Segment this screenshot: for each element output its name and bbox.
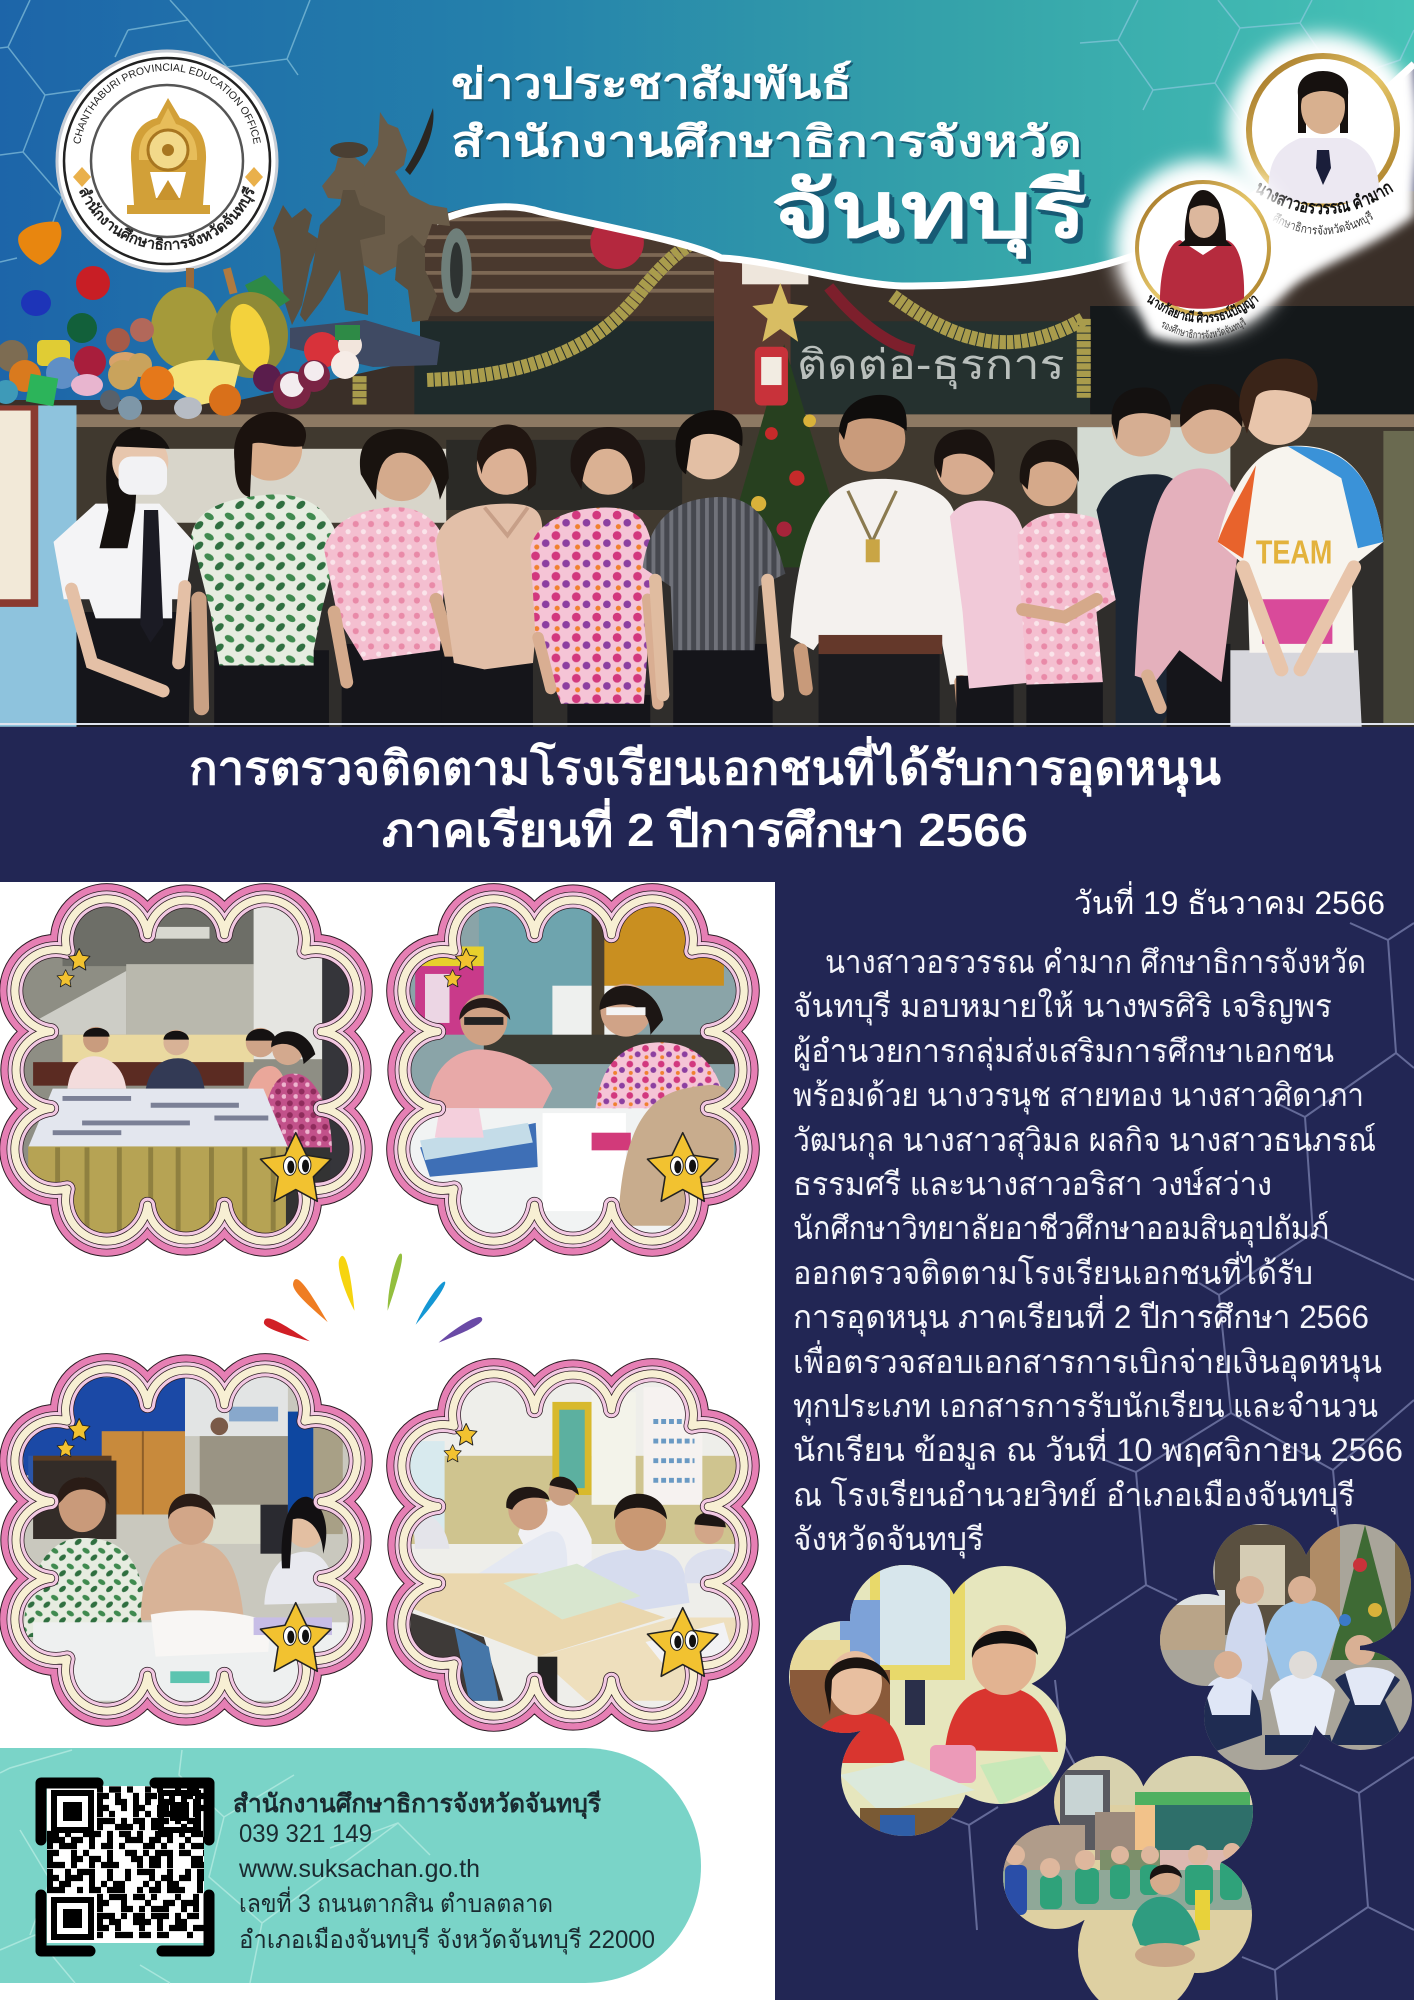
portrait 1 role: ศึกษาธิการจังหวัดจันทบุรี <box>1273 210 1373 235</box>
body text: เพื่อตรวจสอบเอกสารการเบิกจ่ายเงินอุดหนุน <box>793 1340 1382 1382</box>
seal thai text: สำนักงานศึกษาธิการจังหวัดจันทบุรี <box>79 186 255 250</box>
stars <box>444 1423 718 1676</box>
contact bar <box>0 1748 701 1983</box>
person 5: multi-colour floral <box>530 427 658 727</box>
stars <box>57 1418 331 1671</box>
colour burst <box>264 1254 482 1343</box>
person 4: beige <box>436 424 543 727</box>
body text: พร้อมด้วย นางวรนุช สายทอง นางสาวศิดาภา <box>793 1077 1364 1115</box>
seal emblem <box>127 98 210 214</box>
garlands <box>360 232 1084 405</box>
person 1: student <box>54 427 194 727</box>
gemstones <box>0 222 142 420</box>
contact text: สำนักงานศึกษาธิการจังหวัดจันทบุรี <box>233 1790 602 1820</box>
title line 2: ภาคเรียนที่ 2 ปีการศึกษา 2566 <box>382 798 1028 856</box>
heading lines <box>451 60 1087 259</box>
photo frame 2 <box>391 888 755 1252</box>
white soft blob behind portraits <box>1125 40 1414 341</box>
person 11: pink shirt <box>1135 384 1243 727</box>
sign text in photo: ติดต่อ-ธุรการ <box>797 342 1065 390</box>
body text: ธรรมศรี และนางสาวอริสา วงษ์สว่าง <box>793 1166 1272 1202</box>
person 12: colourful team shirt: TEAM <box>1256 535 1332 572</box>
heading line 1: ข่าวประชาสัมพันธ์ <box>451 60 852 107</box>
qr code <box>41 1783 209 1951</box>
seal english text: CHANTHABURI PROVINCIAL EDUCATION OFFICE <box>74 63 261 144</box>
photo frame 3 <box>4 1358 368 1722</box>
body text: ณ โรงเรียนอำนวยวิทย์ อำเภอเมืองจันทบุรี <box>793 1477 1355 1515</box>
portrait 1 name: นางสาวอรวรรณ คำมาก <box>1256 182 1394 214</box>
hexagon lines header <box>0 0 1414 262</box>
portrait 2 <box>1101 146 1304 351</box>
person 7: man in white shirt <box>790 395 972 727</box>
body text: นักศึกษาวิทยาลัยอาชีวศึกษาออมสินอุปถัมภ์ <box>793 1210 1329 1248</box>
title line 1: การตรวจติดตามโรงเรียนเอกชนที่ได้รับการอุดหนุน <box>189 736 1222 797</box>
stars <box>444 948 718 1201</box>
photo frame 4 <box>391 1363 755 1727</box>
date: วันที่ 19 ธันวาคม 2566 <box>1074 881 1385 921</box>
body text: วัฒนกุล นางสาวสุวิมล ผลกิจ นางสาวธนภรณ์ <box>793 1122 1376 1160</box>
body text: ออกตรวจติดตามโรงเรียนเอกชนที่ได้รับ <box>793 1251 1313 1291</box>
person 6: dark grey dress <box>643 410 785 727</box>
group photo <box>0 191 1414 727</box>
blob photo: kindergarten class <box>995 1755 1260 2000</box>
contact text: เลขที่ 3 ถนนตากสิน ตำบลตลาด <box>239 1886 553 1918</box>
christmas tree <box>720 249 852 567</box>
person 10: navy shirt man <box>1096 387 1186 727</box>
body text: จังหวัดจันทบุรี <box>793 1521 984 1559</box>
body text: ผู้อำนวยการกลุ่มส่งเสริมการศึกษาเอกชน <box>793 1033 1334 1071</box>
divider line under photo <box>0 723 1414 725</box>
contact text: www.suksachan.go.th <box>238 1855 480 1883</box>
portrait 1 <box>1212 20 1414 235</box>
contact text: 039 321 149 <box>239 1820 372 1848</box>
fruit <box>106 267 362 419</box>
body text <box>793 944 1403 1559</box>
white left panel <box>0 882 775 2000</box>
body text: จันทบุรี มอบหมายให้ นางพรศิริ เจริญพร <box>793 988 1332 1026</box>
person 3: pink floral <box>324 429 462 727</box>
red ornaments <box>441 215 914 351</box>
photo frame 1 <box>4 888 368 1252</box>
person 12: colourful team shirt <box>1218 359 1383 727</box>
blob photo: red shirts <box>785 1560 1070 1840</box>
logo seal <box>56 50 278 272</box>
portrait 2 role: รองศึกษาธิการจังหวัดจันทบุรี <box>1162 316 1246 338</box>
heading line 2: สำนักงานศึกษาธิการจังหวัด <box>451 118 1082 165</box>
body text: นางสาวอรวรรณ คำมาก ศึกษาธิการจังหวัด <box>825 944 1366 980</box>
blob photo: kids by tree <box>1155 1520 1414 1775</box>
seal diamonds <box>73 167 263 187</box>
statue <box>273 108 450 367</box>
hexagon lines navy <box>951 923 1414 2000</box>
header banner with wave <box>0 0 1414 400</box>
heading line 3: จันทบุรี <box>771 166 1087 259</box>
body text: ทุกประเภท เอกสารการรับนักเรียน และจำนวน <box>793 1388 1378 1426</box>
portrait 2 name: นางกัลยาณี ศิวรรธน์ปัญญา <box>1147 295 1259 323</box>
statue horse and rider <box>322 108 450 275</box>
statue foot soldiers <box>273 190 437 325</box>
body text: การอุดหนุน ภาคเรียนที่ 2 ปีการศึกษา 2566 <box>793 1295 1369 1337</box>
stars <box>57 948 331 1201</box>
person 2: green floral <box>191 412 339 727</box>
person 9: pink floral <box>1017 440 1117 727</box>
person 8: pink blouse <box>934 430 1035 727</box>
contact text: อำเภอเมืองจันทบุรี จังหวัดจันทบุรี 22000 <box>239 1926 655 1955</box>
body text: นักเรียน ข้อมูล ณ วันที่ 10 พฤศจิกายน 2566 <box>793 1428 1403 1470</box>
contact text <box>233 1790 655 1955</box>
title <box>189 736 1222 856</box>
